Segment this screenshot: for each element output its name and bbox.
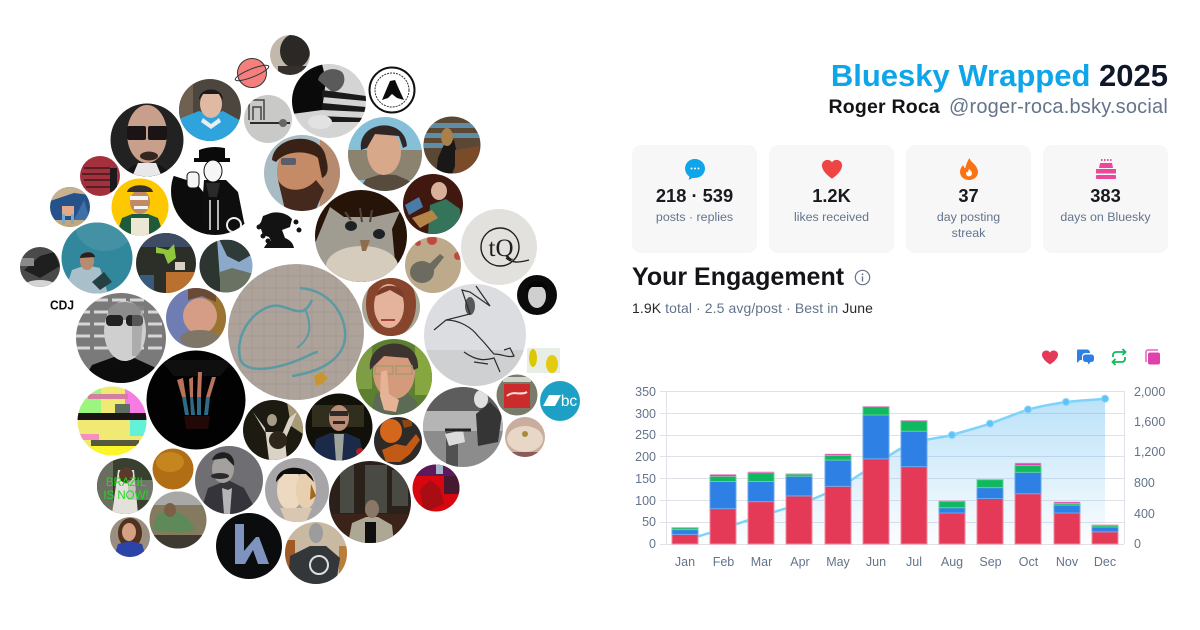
avatar: dark room with neon [136,233,196,294]
avatar: pink planet [234,58,270,88]
left axis labels [635,385,656,551]
month labels: Apr [790,555,810,569]
avatar: man in blue shirt [179,79,241,141]
stat card: day posting streak [906,145,1031,253]
engagement summary line: 1.9K total · 2.5 avg/post · Best in June [632,300,873,316]
icon: birthday cake [1096,159,1116,179]
avatar: bearded man [264,135,340,214]
likes bars [672,459,1118,544]
avatar: black and white woman's face [517,275,557,315]
chart grid and axes [660,391,1124,544]
right axis labels: 800 [1134,476,1155,490]
avatar: black and white woman with axe [423,387,503,468]
avatar: orange skull [374,417,422,465]
avatar: rebel stamp [368,66,416,114]
legend: replies chat bubbles [1077,349,1094,364]
avatar: red wall with figure [80,156,120,196]
label: likes received [794,210,869,224]
avatar: CDJ small logo: CDJ [50,298,74,312]
label: streak [952,226,985,240]
quotes bars [672,406,1118,528]
avatar: bauhaus head logo [256,212,302,248]
avatar: tQ logo [461,209,537,285]
avatar: sleeping man [166,288,226,348]
avatar: monkey painting [405,235,462,293]
avatar: 3D rendered faces [265,458,329,522]
legend: reposts arrows [1112,349,1126,365]
avatar: man with glasses black and white [76,293,166,383]
right axis labels: 1,200 [1134,445,1165,459]
avatar bubble cluster [20,35,580,584]
left axis labels: 50 [642,515,656,529]
month labels: Feb [713,555,734,569]
month labels [675,555,1116,569]
avatar: black with legs and shoes [146,350,246,450]
avatar: gray wall frame [244,95,292,143]
avatar: gray figure [20,247,60,287]
avatar: Coca-Cola sign [496,374,538,416]
right axis labels [1134,385,1165,551]
month labels: Oct [1019,555,1039,569]
month labels: Nov [1056,555,1079,569]
cumulative area [685,399,1105,544]
label [937,210,1000,240]
avatar: glitch test card [77,386,147,456]
avatar: smiling man with city view [348,117,422,191]
avatar: man with finger to glasses [356,339,432,415]
cumulative line [685,399,1105,541]
label: posts · replies [656,210,733,224]
avatar: yellow background man [111,178,169,236]
avatar: man in Ramones shirt [285,522,347,584]
left axis labels: 250 [635,428,656,442]
user name and handle: Roger Roca @roger-roca.bsky.social [828,96,1168,118]
month labels: Jan [675,555,695,569]
month labels: Aug [941,555,963,569]
avatar: chimp in striped shirt [292,64,366,138]
month labels: Mar [751,555,772,569]
right axis labels: 2,000 [1134,385,1165,399]
avatar: Brazil is now: BRAZIL [106,477,147,489]
month labels: Dec [1094,555,1116,569]
avatar: Brazil is now [97,458,153,514]
avatar: man in suit with mustache [305,393,373,462]
right axis labels: 400 [1134,507,1155,521]
icon: info [854,270,870,286]
month labels: May [826,555,851,569]
avatar: amber texture [152,448,194,490]
right axis labels: 1,600 [1134,415,1165,429]
stat card: likes received [769,145,894,253]
avatar: tQ logo: tQ [488,235,514,262]
stat card: posts and replies [632,145,757,253]
engagement chart [635,348,1165,569]
left axis labels: 150 [635,472,656,486]
value: 218 · 539 [656,185,733,206]
avatar: bandcamp logo [540,381,580,421]
legend: likes heart [1042,350,1058,364]
avatar: tabby cat [312,190,407,287]
stat card: days on Bluesky [1043,145,1168,253]
label: days on Bluesky [1060,210,1151,224]
icon: speech bubble [685,159,705,180]
avatar: Brazil is now: IS NOW! [103,490,149,502]
right axis labels: 0 [1134,537,1141,551]
value: 383 [1090,185,1121,206]
left axis labels: 100 [635,494,656,508]
legend: quotes copy squares [1146,350,1160,364]
avatar: black logo with blue letter [216,513,282,579]
avatar: silhouette portrait [270,34,310,76]
title: Bluesky Wrapped 2025: Bluesky Wrapped 2025 [831,58,1168,93]
avatar: ink line drawing [424,284,526,386]
avatar: bandcamp logo: bc [561,393,577,410]
avatar: sky and tree [199,239,254,293]
avatar: bald man in sunglasses [110,103,184,177]
avatar: white statue [243,400,303,460]
avatar: woman reading in library [423,116,481,174]
avatar: library portrait [329,461,411,544]
left axis labels: 0 [649,537,656,551]
label: day posting [937,210,1000,224]
icon: heart [822,160,842,179]
stacked bars [672,406,1118,544]
avatar: gray engraved portrait [195,446,263,514]
icon: flame [960,158,978,180]
avatar: smiling woman with red hair [362,278,420,336]
replies bars [672,415,1118,534]
month labels: Jun [866,555,886,569]
avatar: graph paper with teal stitching [228,264,364,400]
month labels: Jul [906,555,922,569]
avatar: blue stairs [50,187,90,227]
avatar: red infrared crowd [412,464,460,512]
value: 1.2K [812,185,851,206]
left axis labels: 200 [635,450,656,464]
month labels: Sep [979,555,1002,569]
avatar: top hat engraving [171,147,245,235]
cumulative points [948,395,1108,438]
heading: Your Engagement: Your Engagement [632,263,844,291]
avatar: yellow ducks image [527,348,560,373]
reposts bars [672,407,1118,530]
value: 37 [958,185,979,206]
avatar: woman with curly hair [110,517,150,557]
avatar: man in green shirt [149,491,207,549]
avatar: teal wall reader [62,222,132,294]
avatar: pillow and toy [505,417,545,458]
avatar: man in green polo with laptop [403,174,463,234]
left axis labels: 300 [635,407,656,421]
left axis labels: 350 [635,385,656,399]
